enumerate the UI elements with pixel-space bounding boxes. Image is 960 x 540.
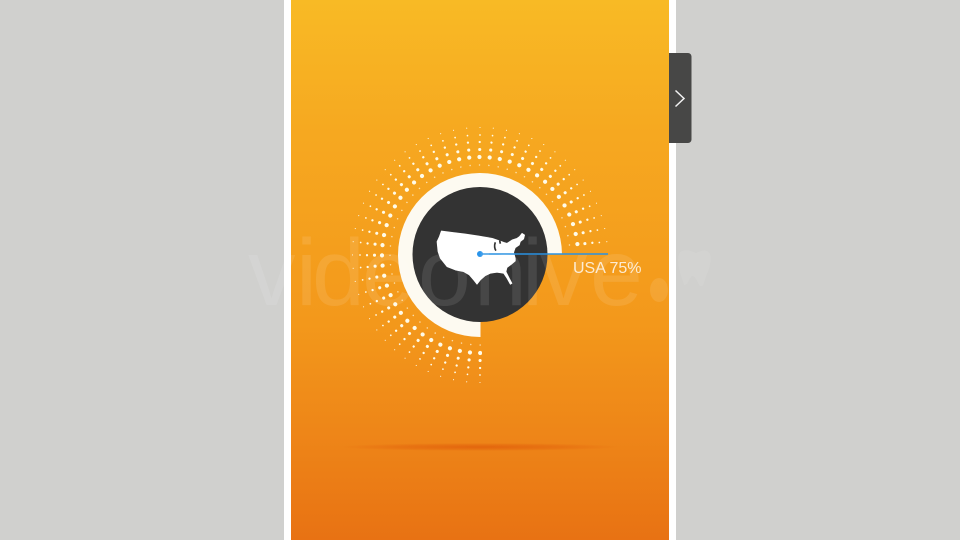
floor shadow	[340, 443, 620, 451]
callout label: USA 75%	[573, 260, 641, 277]
side tab with chevron	[669, 53, 692, 143]
dark center circle	[412, 187, 548, 322]
callout line to map	[477, 251, 608, 257]
75% progress ring	[398, 173, 562, 337]
watermark: videohive	[248, 220, 643, 326]
orange panel	[291, 0, 669, 540]
phone frame	[284, 0, 676, 540]
icon: USA map	[437, 231, 525, 284]
radial dot pattern	[352, 128, 608, 382]
